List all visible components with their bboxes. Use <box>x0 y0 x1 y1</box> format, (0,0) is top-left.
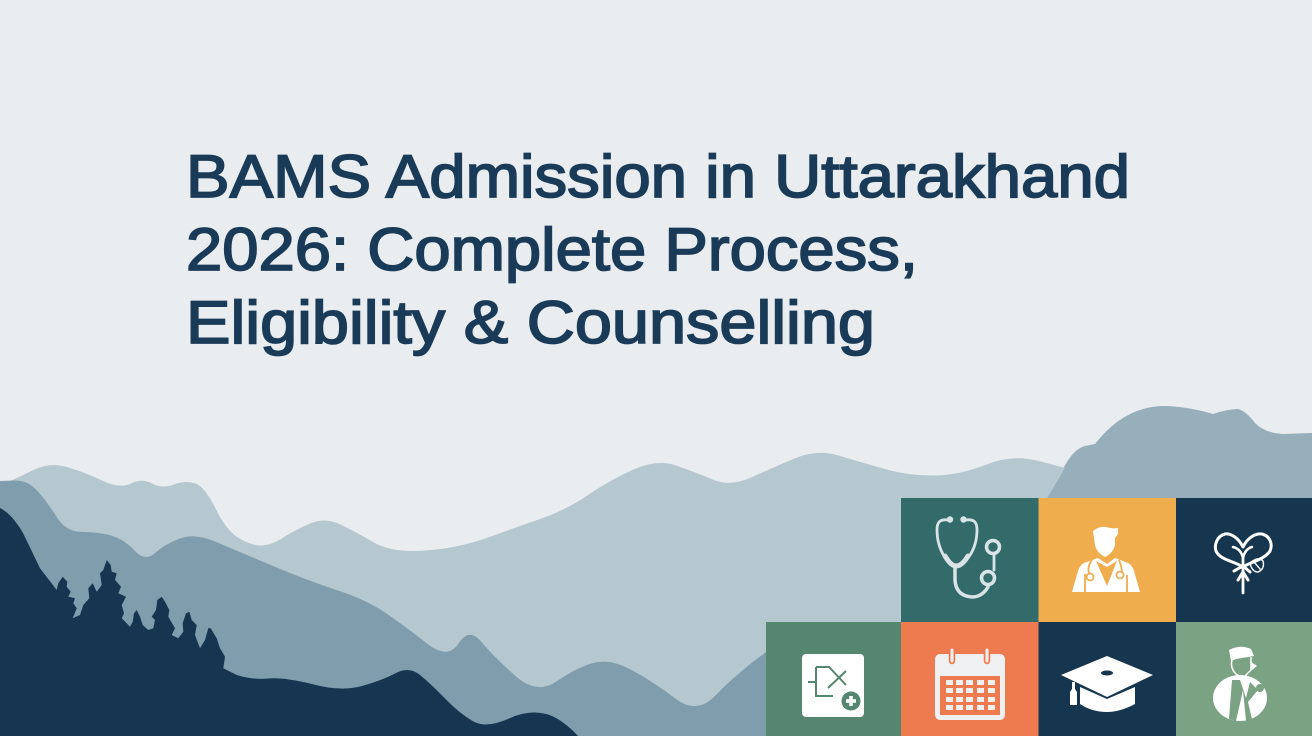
tile: doctor <box>1038 498 1176 622</box>
distant pale ridge <box>0 453 1065 736</box>
tile: calendar <box>901 622 1038 736</box>
tile: prescription card <box>766 622 901 736</box>
dark foreground hill with pine trees <box>0 508 578 736</box>
middle ridge <box>0 480 800 736</box>
icon grid <box>766 498 1312 736</box>
tile: heart herb <box>1176 498 1312 622</box>
title: Eligibility & Counselling <box>186 289 875 356</box>
title: 2026: Complete Process, <box>186 216 918 283</box>
tile: stethoscope <box>901 498 1038 622</box>
tile: ayurvedic doctor <box>1176 622 1312 736</box>
title: BAMS Admission in Uttarakhand <box>186 143 1130 210</box>
landscape: layered mountains <box>0 406 1312 736</box>
tile: graduation cap <box>1038 622 1176 736</box>
title <box>186 143 1130 356</box>
far right mountain <box>1040 406 1312 736</box>
